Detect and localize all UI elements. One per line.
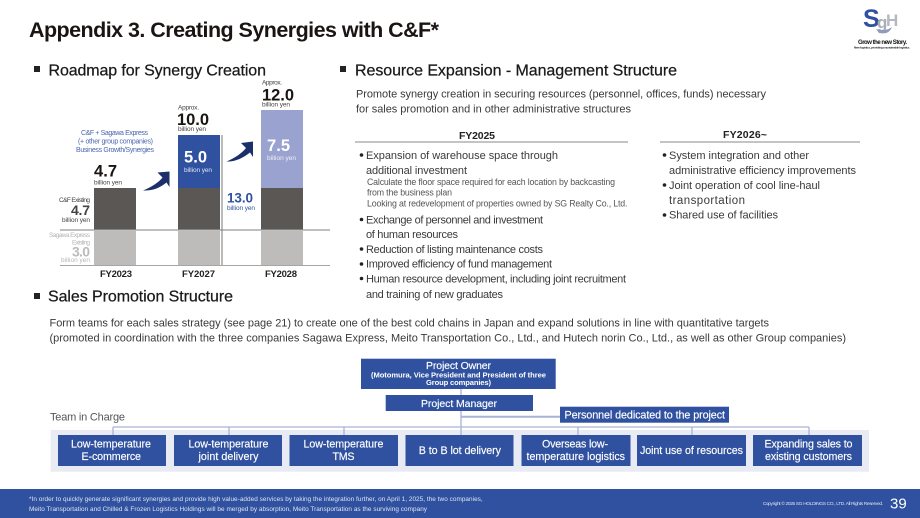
value: FY2027 total (177, 104, 209, 133)
box: expanding sales (753, 435, 862, 466)
bar: FY2028 (261, 110, 303, 265)
arrow: FY2027 to FY2028 (226, 142, 253, 162)
box: project owner: Project Owner (426, 360, 492, 372)
list: FY2025 items: Improved efficiency of fund management (366, 259, 552, 271)
list: FY2025 items: from the business plan (367, 188, 452, 198)
label: Sagawa Express existing (49, 232, 91, 264)
list: FY2026 items: System integration and other (669, 150, 809, 162)
list: FY2026 items: Shared use of facilities (669, 210, 778, 222)
value: FY2028 total (262, 80, 294, 109)
box: low-temperature joint delivery: joint delivery (198, 451, 259, 463)
list: FY2026 items: transportation (669, 195, 745, 207)
text: sales intro: Form teams for each sales strategy (see page 21) to create one of the best cold chains in Japan and expand solutions in line with quantitative targets (50, 318, 770, 330)
header: FY2025: FY2025 (459, 130, 495, 142)
footnote: *In order to quickly generate significant synergies and provide high value-added services by taking the integration further, on April 1, 2025, the two companies, (29, 496, 483, 503)
axis labels (100, 269, 297, 280)
box: dedicated personnel: Personnel dedicated to the project (564, 410, 725, 422)
label: Sagawa Express existing: 3.0 (72, 244, 90, 260)
list: FY2026 items (663, 150, 856, 222)
value: FY2023 total: billion yen (94, 180, 122, 186)
value: FY2027 synergy (184, 149, 212, 174)
list: FY2025 items: additional investment (366, 165, 467, 177)
text: resource intro (356, 88, 766, 116)
box: low-temperature e-commerce: E-commerce (82, 451, 141, 463)
box: overseas logistics: temperature logistics (526, 451, 625, 463)
label: C&F existing: 4.7 (71, 202, 90, 218)
list: FY2025 items: Exchange of personnel and investment (366, 214, 543, 226)
box: expanding sales: Expanding sales to (764, 438, 853, 450)
value: FY2028 total: 12.0 (262, 87, 294, 105)
callout: business growth (76, 130, 154, 154)
bracket: 13.0 total (222, 135, 255, 265)
callout: business growth: Business Growth/Synergies (76, 147, 154, 154)
box: project owner: Group companies) (426, 378, 491, 387)
value: FY2027 total: Approx. (178, 104, 199, 112)
box: joint use of resources (637, 435, 746, 466)
label: C&F existing: billion yen (62, 217, 90, 224)
box: project owner: (Motomura, Vice President and President of three (371, 370, 546, 380)
box: low-temperature TMS (290, 435, 398, 466)
bar: FY2027 (178, 135, 220, 265)
heading: roadmap: Roadmap for Synergy Creation (48, 62, 266, 80)
label: team in charge: Team in Charge (50, 412, 125, 424)
logo: SGH (854, 5, 910, 50)
box: joint use of resources: Joint use of resources (640, 445, 743, 457)
list: FY2025 items: Calculate the floor space required for each location by backcasting (367, 177, 615, 187)
callout: business growth: (+ other group companies) (78, 139, 153, 146)
value: FY2028 total: billion yen (262, 102, 290, 109)
box: low-temperature joint delivery: Low-temperature (188, 438, 269, 450)
heading: sales promotion: Sales Promotion Structure (48, 289, 233, 306)
value: FY2028 synergy: billion yen (267, 155, 296, 162)
value: FY2027 synergy: 5.0 (184, 149, 207, 167)
label: Sagawa Express existing: Sagawa Express (49, 232, 91, 239)
list: FY2025 items: Looking at redevelopment of properties owned by SG Realty Co., Ltd. (367, 198, 628, 208)
list: FY2026 items: administrative efficiency improvements (669, 165, 856, 177)
axis labels: FY2028 (265, 269, 297, 280)
panel: FY2026 onward (660, 129, 860, 222)
value: FY2027 synergy: billion yen (184, 167, 212, 174)
box: low-temperature TMS: Low-temperature (304, 438, 384, 450)
box: project manager (386, 395, 533, 411)
text: resource intro: Promote synergy creation in securing resources (personnel, offices, funds) necessary (356, 88, 766, 100)
label: C&F existing: C&F Existing (59, 197, 90, 204)
axis labels: FY2027 (182, 269, 215, 280)
box: project owner (361, 359, 556, 389)
footer band (0, 489, 920, 518)
box: B to B lot delivery (406, 435, 514, 466)
text: sales intro: (promoted in coordination with the three companies Sagawa Express, Meito Transportation Co., Ltd., and Hutech norin Co., Ltd., as well as other Group companies) (50, 333, 846, 345)
box: low-temperature e-commerce: Low-temperature (71, 438, 151, 450)
text: sales intro (50, 318, 846, 345)
value: FY2028 synergy (267, 137, 296, 162)
box: expanding sales: existing customers (765, 451, 852, 463)
list: FY2025 items: Expansion of warehouse space through (366, 150, 558, 162)
footnote: Meito Transportation and Chilled & Frozen Logistics Holdings will be merged by absorption, Meito Transportation as the surviving company (29, 506, 428, 513)
panel: org chart (50, 359, 869, 472)
bracket: 13.0 total: 13.0 (227, 191, 253, 206)
panel: FY2025 (355, 130, 628, 301)
page number: 39 (890, 496, 907, 513)
heading: resource expansion: Resource Expansion - Management Structure (355, 62, 677, 80)
value: FY2028 synergy: 7.5 (267, 137, 290, 155)
list: FY2025 items: and training of new graduates (366, 289, 504, 301)
box: low-temperature TMS: TMS (332, 451, 354, 463)
logo: SGH: New logistics, providing a sustainable logistics. (854, 46, 910, 50)
title: Appendix 3. Creating Synergies with C&F* (29, 18, 440, 42)
value: FY2027 total: billion yen (178, 126, 206, 133)
text: resource intro: for sales promotion and in other administrative structures (356, 104, 632, 116)
arrow: FY2023 to FY2027 (143, 172, 170, 191)
logo: SGH: Grow the new Story. (858, 40, 907, 46)
box: overseas logistics: Overseas low- (542, 438, 608, 450)
value: FY2027 total: 10.0 (177, 111, 209, 129)
value: FY2023 total: 4.7 (94, 163, 117, 181)
logo: SGH: H (886, 11, 898, 30)
list: FY2026 items: Joint operation of cool line-haul (669, 180, 820, 192)
footnote (29, 496, 483, 513)
logo: SGH: S (863, 5, 880, 33)
copyright: Copyright © 2025 SG HOLDINGS CO., LTD. All Rights Reserved. (763, 500, 883, 507)
box: B to B lot delivery: B to B lot delivery (419, 445, 502, 457)
panel: roadmap bar chart (49, 80, 330, 280)
label: C&F existing (59, 197, 90, 224)
logo: SGH: g (877, 13, 887, 32)
box: low-temperature e-commerce (58, 435, 166, 466)
callout: business growth: C&F + Sagawa Express (81, 130, 148, 137)
header: FY2026~: FY2026~ (723, 129, 767, 141)
box: project manager: Project Manager (421, 398, 498, 410)
label: Sagawa Express existing: billion yen (61, 257, 90, 264)
label: Sagawa Express existing: Existing (72, 240, 90, 246)
box: low-temperature joint delivery (174, 435, 282, 466)
bar: FY2023 (94, 188, 136, 265)
list: FY2025 items: of human resources (366, 229, 458, 241)
value: FY2023 total (94, 163, 122, 186)
list: FY2025 items (360, 150, 628, 301)
value: FY2028 total: Approx. (262, 80, 282, 87)
bracket: 13.0 total: billion yen (227, 205, 255, 212)
box: overseas logistics (522, 435, 630, 466)
list: FY2025 items: Reduction of listing maintenance costs (366, 244, 544, 256)
axis labels: FY2023 (100, 269, 132, 280)
list: FY2025 items: Human resource development, including joint recruitment (366, 274, 626, 286)
